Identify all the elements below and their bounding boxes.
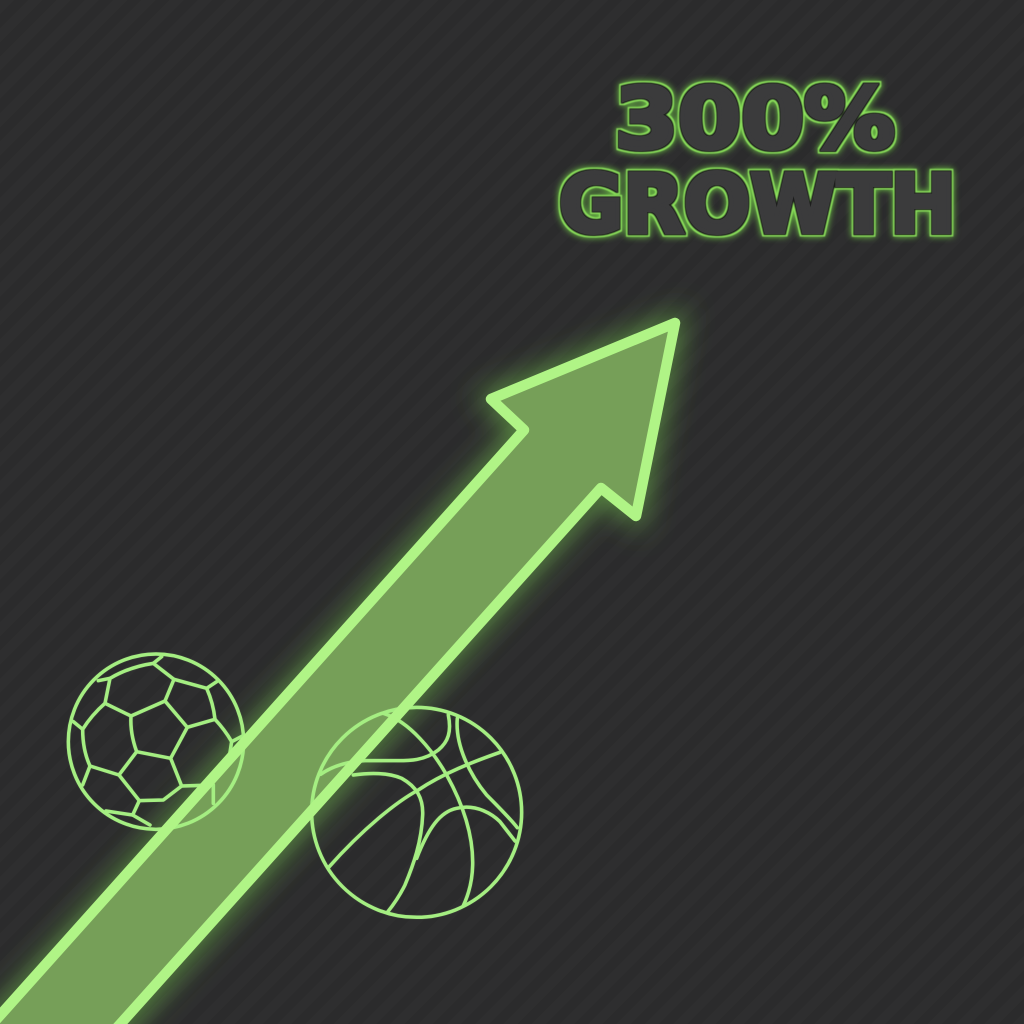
- icon: soccer ball: [68, 654, 244, 829]
- arrow body fill: [0, 323, 675, 1024]
- title line: 300%: 300%: [615, 70, 895, 168]
- arrow glow: [0, 323, 675, 1024]
- arrow outline: [0, 323, 675, 1024]
- title line: GROWTH: GROWTH: [559, 158, 956, 251]
- title: 300% GROWTH: [559, 70, 956, 251]
- icon: basketball: [312, 707, 522, 917]
